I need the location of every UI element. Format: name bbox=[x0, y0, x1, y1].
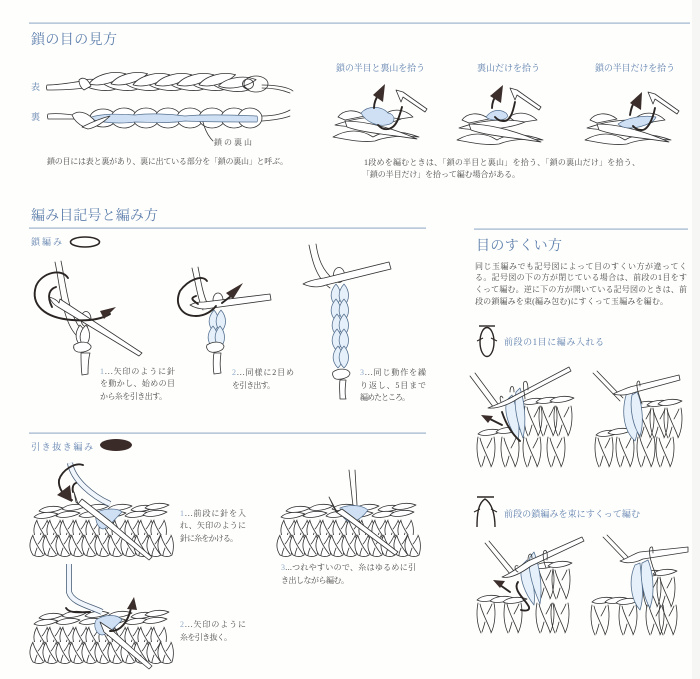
subheading: half stitch and ridge: 鎖の半目と裏山を拾う bbox=[336, 62, 425, 73]
subheading: work around chain: 前段の鎖編みを束にすくって編む bbox=[504, 508, 640, 519]
callout: back ridge label: 鎖の裏山 bbox=[214, 137, 252, 147]
text: chain step 3 bbox=[360, 367, 426, 402]
text: chain step 3: 3...同じ動作を繰 bbox=[360, 367, 426, 377]
label: front: 表 bbox=[31, 81, 40, 92]
illustration: open step 1 bbox=[477, 537, 584, 633]
subheading: ridge only: 裏山だけを拾う bbox=[477, 62, 540, 73]
text: slip step 3: き出しながら編む。 bbox=[281, 575, 349, 585]
text: chain step 1 bbox=[100, 366, 175, 401]
text: chain step 3: り返し、5目まで bbox=[360, 381, 426, 390]
heading: stitch symbols: 編み目記号と編み方 bbox=[31, 207, 158, 224]
panel: stitch symbols and method bbox=[29, 207, 426, 669]
text: slip step 2 bbox=[180, 619, 246, 642]
text: chain step 1: 1...矢印のように針 bbox=[100, 366, 175, 376]
text: picking explanation: 段の鎖編みを束(編み包む)にすくって玉編みを編む。 bbox=[475, 296, 668, 306]
text: slip step 1: 1...前段に針を入 bbox=[180, 508, 246, 518]
text: chain step 3: 編めたところ。 bbox=[360, 392, 410, 402]
text: slip step 2: 2...矢印のように bbox=[180, 619, 246, 629]
text: slip step 2: 糸を引き抜く。 bbox=[180, 632, 232, 642]
panel: how to read chains bbox=[29, 22, 690, 179]
text: chain step 2: 2...同様に2目め bbox=[232, 367, 294, 377]
illustration: chain step 1 bbox=[35, 261, 142, 375]
icon: chain symbol bbox=[70, 237, 100, 247]
text: first row explanation bbox=[362, 157, 640, 179]
subheading: half stitch only: 鎖の半目だけを拾う bbox=[595, 62, 675, 73]
illustration: pick half and ridge bbox=[333, 84, 427, 142]
illustration: open step 2 bbox=[591, 535, 688, 635]
text: first row explanation: 1段めを編むときは、「鎖の半目と裏山」を拾う、「鎖の裏山だけ」を拾う、 bbox=[364, 157, 640, 167]
subheading: chain stitch: 鎖編み bbox=[31, 236, 62, 247]
icon: closed symbol bbox=[477, 326, 497, 356]
subheading: slip stitch: 引き抜き編み bbox=[31, 441, 93, 452]
text: slip step 1: 針に糸をかける。 bbox=[180, 533, 238, 543]
illustration: slip step 2 bbox=[30, 564, 173, 669]
panel: how to pick stitches bbox=[470, 228, 688, 635]
text: picking explanation: 同じ玉編みでも記号図によって目のすくい方が違ってく bbox=[475, 261, 687, 271]
text: chain step 2 bbox=[232, 367, 294, 390]
text: chain step 1: を動かし、始めの目 bbox=[100, 378, 175, 388]
text: slip step 3: 3...つれやすいので、糸はゆるめに引 bbox=[281, 562, 416, 572]
text: slip step 1: れ、矢印のように bbox=[180, 520, 246, 530]
icon: open symbol bbox=[474, 497, 497, 527]
text: picking explanation: る。記号図の下の方が閉じている場合は、前段の1目をす bbox=[475, 272, 687, 282]
text: picking explanation: くって編む。逆に下の方が開いている記号図のときは、前 bbox=[475, 284, 687, 294]
icon: slip stitch symbol bbox=[100, 439, 132, 451]
text: chain step 2: を引き出す。 bbox=[232, 380, 275, 390]
text: chain caption: 鎖の目には表と裏があり、裏に出ている部分を「鎖の裏山」と呼ぶ。 bbox=[47, 156, 288, 166]
text: first row explanation: 「鎖の半目だけ」を拾って編む場合がある。 bbox=[362, 169, 520, 179]
illustration: slip step 1 bbox=[30, 463, 173, 560]
text: slip step 3 bbox=[281, 562, 416, 585]
illustration: closed step 1 bbox=[470, 367, 574, 467]
text: chain step 1: から糸を引き出す。 bbox=[100, 391, 167, 401]
heading: chain reading: 鎖の目の見方 bbox=[31, 31, 117, 48]
illustration: slip step 3 bbox=[277, 470, 420, 556]
illustration: chain front bbox=[46, 69, 293, 95]
illustration: pick ridge only bbox=[457, 85, 543, 145]
text: slip step 1 bbox=[180, 508, 246, 543]
text: picking explanation bbox=[475, 261, 687, 306]
subheading: work into one stitch: 前段の1目に編み入れる bbox=[504, 336, 604, 347]
illustration: chain back bbox=[48, 108, 290, 129]
heading: picking stitches: 目のすくい方 bbox=[476, 237, 562, 254]
illustration: chain step 3 bbox=[303, 244, 391, 399]
callout: back ridge label bbox=[203, 122, 252, 147]
illustration: pick half stitch only bbox=[585, 92, 679, 145]
label: back: 裏 bbox=[31, 111, 40, 122]
background scan edge bbox=[692, 0, 700, 679]
illustration: closed step 2 bbox=[593, 371, 682, 467]
illustration: chain step 2 bbox=[178, 267, 271, 374]
